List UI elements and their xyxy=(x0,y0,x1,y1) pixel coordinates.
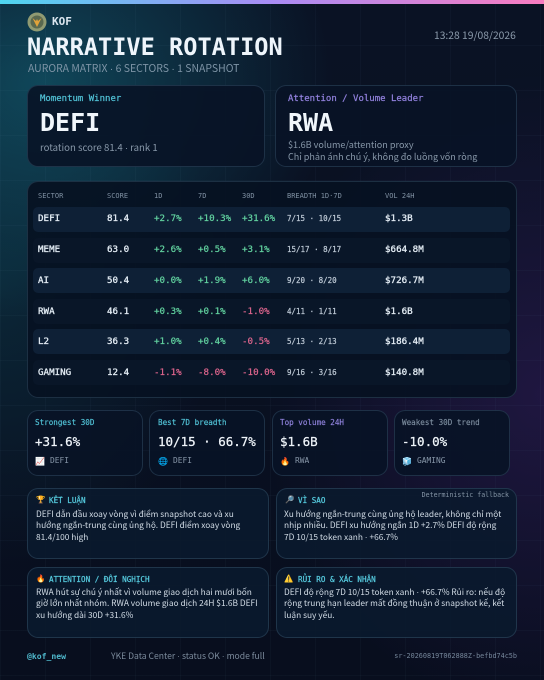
label: Weakest 30D trend xyxy=(402,418,480,427)
body text xyxy=(36,508,240,543)
body text: DEFI độ rộng 7D 10/15 token xanh · +66.7% Rủi ro: nếu độ xyxy=(284,586,505,598)
row: AI xyxy=(38,275,424,286)
panel: top volume xyxy=(272,410,388,476)
body text: 7D 10/15 token xanh · +66.7% xyxy=(284,531,398,543)
row: MEME: +0.5% xyxy=(198,244,226,255)
score note: rotation score 81.4 · rank 1 xyxy=(40,140,158,154)
table header: VOL 24H xyxy=(385,192,415,200)
panel: best 7D breadth xyxy=(149,410,265,476)
row: AI: 50.4 xyxy=(107,275,129,286)
row: MEME: 15/17 · 8/17 xyxy=(287,245,341,254)
brand name: KOF xyxy=(52,15,72,28)
footer xyxy=(27,650,517,662)
logo badge xyxy=(28,12,46,32)
handle: @kof_new xyxy=(27,651,66,661)
note line 2: Chỉ phản ánh chú ý, không đo luồng vốn ròng xyxy=(288,150,477,163)
row: GAMING: 9/16 · 3/16 xyxy=(287,368,337,377)
panel: momentum winner xyxy=(27,85,265,167)
snapshot id: sr-20260819T062888Z-befbd74c5b xyxy=(394,652,517,660)
row: DEFI: 7/15 · 10/15 xyxy=(287,214,341,223)
body text: RWA hút sự chú ý nhất vì volume giao dịch hai mươi bốn xyxy=(36,586,252,598)
body text xyxy=(284,508,502,543)
heading: KẾT LUẬN xyxy=(49,496,86,505)
heading: RỦI RO & XÁC NHẬN xyxy=(298,575,376,584)
row: L2 xyxy=(38,336,424,347)
table header: 7D xyxy=(198,192,206,200)
panel: risk xyxy=(276,567,517,638)
row: GAMING: $140.8M xyxy=(385,367,424,378)
row: L2: 5/13 · 2/13 xyxy=(287,337,337,346)
row: RWA: RWA xyxy=(38,306,55,317)
icon: warning: ⚠️ xyxy=(284,573,293,584)
label: Momentum Winner xyxy=(40,94,121,104)
panel: why xyxy=(276,488,517,559)
row: RWA: 46.1 xyxy=(107,306,129,317)
label: Strongest 30D xyxy=(35,418,94,427)
row: L2: +0.4% xyxy=(198,336,226,347)
body text: Xu hướng ngắn-trung cùng ủng hộ leader, không chỉ một xyxy=(284,508,501,520)
row: MEME: MEME xyxy=(38,244,60,255)
body text: 81.4/100 high xyxy=(36,531,88,543)
row: MEME: 63.0 xyxy=(107,244,129,255)
value: -10.0% xyxy=(402,434,447,449)
status: YKE Data Center · status OK · mode full xyxy=(111,650,265,662)
body text: rộng trung hạn leader mất đồng thuận ở snapshot kế, kết xyxy=(284,597,504,609)
row: GAMING: 12.4 xyxy=(107,367,129,378)
body text: xu hướng dài 30D +31.6% xyxy=(36,609,133,621)
body text: hướng ngắn-trung cùng ủng hộ. DEFI điểm xoay vòng xyxy=(36,519,240,531)
icon: magnifier: 🔎 xyxy=(285,494,294,505)
value: 10/15 · 66.7% xyxy=(158,434,256,449)
row: RWA: 4/11 · 1/11 xyxy=(287,307,337,316)
heading: VÌ SAO xyxy=(298,496,325,505)
row: MEME: +3.1% xyxy=(242,244,270,255)
icon: ice: 🧊 xyxy=(402,457,412,466)
header xyxy=(27,12,516,76)
table header: SCORE xyxy=(107,192,128,200)
row: GAMING xyxy=(38,367,424,378)
label: Attention / Volume Leader xyxy=(288,94,423,104)
row: DEFI: 81.4 xyxy=(107,213,129,224)
timestamp: 13:28 19/08/2026 xyxy=(434,27,516,42)
row: AI: +1.9% xyxy=(198,275,226,286)
row: MEME xyxy=(38,244,424,255)
row: DEFI: +10.3% xyxy=(198,213,231,224)
sector tag: RWA xyxy=(295,456,309,465)
row: AI: $726.7M xyxy=(385,275,424,286)
row: AI: +0.0% xyxy=(154,275,182,286)
row: GAMING: -1.1% xyxy=(154,367,182,378)
title: NARRATIVE ROTATION xyxy=(27,33,283,61)
panel: attention leader xyxy=(275,85,517,167)
icon: fire: 🔥 xyxy=(36,573,45,584)
value: +31.6% xyxy=(35,434,80,449)
note line 1: $1.6B volume/attention proxy xyxy=(288,137,414,151)
heading: ATTENTION / ĐỐI NGHỊCH xyxy=(49,575,150,584)
table header: BREADTH 1D·7D xyxy=(287,192,342,200)
label: Top volume 24H xyxy=(280,418,344,427)
body text: DEFI dẫn đầu xoay vòng vì điểm snapshot cao và xu xyxy=(36,508,234,520)
fallback note: Deterministic fallback xyxy=(422,491,509,499)
row: MEME: +2.6% xyxy=(154,244,182,255)
row: L2: L2 xyxy=(38,336,49,347)
row: L2: -0.5% xyxy=(242,336,270,347)
sector tag: DEFI xyxy=(173,456,192,465)
body text xyxy=(36,586,258,621)
table header: SECTOR xyxy=(38,192,63,200)
row: RWA: +0.3% xyxy=(154,306,182,317)
icon: globe: 🌐 xyxy=(158,457,168,466)
row: RWA: +0.1% xyxy=(198,306,226,317)
table header: 1D xyxy=(154,192,162,200)
label: Best 7D breadth xyxy=(158,418,227,427)
table header xyxy=(38,192,415,200)
body text xyxy=(284,586,505,621)
subtitle: AURORA MATRIX · 6 SECTORS · 1 SNAPSHOT xyxy=(28,61,239,76)
row: AI: 9/20 · 8/20 xyxy=(287,276,337,285)
row: RWA: $1.6B xyxy=(385,306,413,317)
body text: luận suy yếu. xyxy=(284,609,335,621)
sector tag: DEFI xyxy=(50,456,69,465)
row: L2: $186.4M xyxy=(385,336,424,347)
row: GAMING: GAMING xyxy=(38,367,71,378)
icon: chart: 📈 xyxy=(35,457,45,466)
row: DEFI xyxy=(38,213,413,224)
row: RWA xyxy=(38,306,413,317)
leader name: RWA xyxy=(288,108,333,137)
row: DEFI: DEFI xyxy=(38,213,60,224)
panel: weakest 30D xyxy=(394,410,510,476)
row: MEME: $664.8M xyxy=(385,244,424,255)
row: AI: AI xyxy=(38,275,49,286)
row: RWA: -1.0% xyxy=(242,306,270,317)
table header: 30D xyxy=(242,192,255,200)
panel: sector table xyxy=(27,181,517,398)
row: GAMING: -8.0% xyxy=(198,367,226,378)
icon: trophy: 🏆 xyxy=(36,494,45,505)
row: DEFI: +31.6% xyxy=(242,213,275,224)
icon: fire: 🔥 xyxy=(280,457,290,466)
row: L2: +1.0% xyxy=(154,336,182,347)
sector tag: GAMING xyxy=(417,456,446,465)
winner name: DEFI xyxy=(40,108,100,137)
value: $1.6B xyxy=(280,434,318,449)
row: AI: +6.0% xyxy=(242,275,270,286)
panel: conclusion xyxy=(27,488,269,559)
row: DEFI: +2.7% xyxy=(154,213,182,224)
panel: attention divergence xyxy=(27,567,269,638)
body text: giờ lớn nhất nhóm. RWA volume giao dịch 24H $1.6B DEFI xyxy=(36,597,258,609)
row: GAMING: -10.0% xyxy=(242,367,275,378)
panel: strongest 30D xyxy=(27,410,143,476)
body text: nhịp nhiều. DEFI xu hướng ngắn 1D +2.7% DEFI độ rộng xyxy=(284,519,496,531)
row: DEFI: $1.3B xyxy=(385,213,413,224)
row: L2: 36.3 xyxy=(107,336,129,347)
